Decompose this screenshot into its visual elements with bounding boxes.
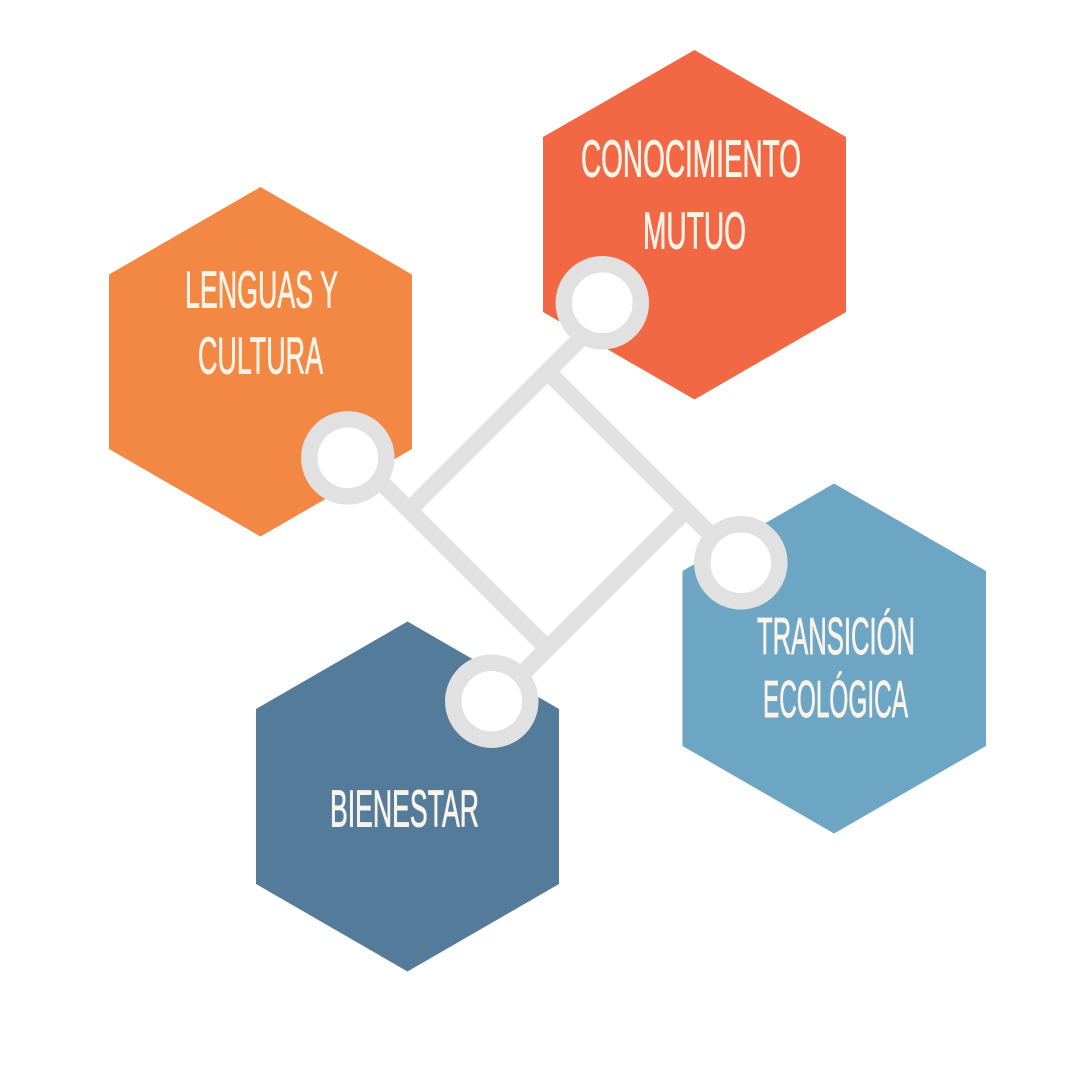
label: conocimiento mutuo: CONOCIMIENTO [581, 130, 801, 188]
node: left ring [309, 419, 386, 496]
node: top ring [564, 264, 641, 341]
hexagon: transición ecológica [682, 484, 986, 834]
hexagon: conocimiento mutuo [543, 50, 846, 400]
label: conocimiento mutuo [581, 130, 801, 260]
node: right ring [702, 524, 779, 601]
label: lenguas y cultura: LENGUAS Y [185, 262, 338, 320]
connector: central diamond lines [370, 334, 735, 691]
label: bienestar: BIENESTAR [330, 780, 479, 838]
hexagon: transición ecológica: TRANSICIÓN [757, 608, 915, 666]
label: lenguas y cultura: CULTURA [198, 328, 323, 386]
label: lenguas y cultura [185, 262, 338, 386]
label: conocimiento mutuo: MUTUO [643, 202, 746, 260]
hexagon: transición ecológica: ECOLÓGICA [763, 671, 908, 729]
hexagon: bienestar [256, 622, 559, 972]
hexagon: lenguas y cultura [109, 187, 412, 536]
node: bottom ring [453, 663, 530, 740]
label: transición ecológica [757, 608, 915, 729]
